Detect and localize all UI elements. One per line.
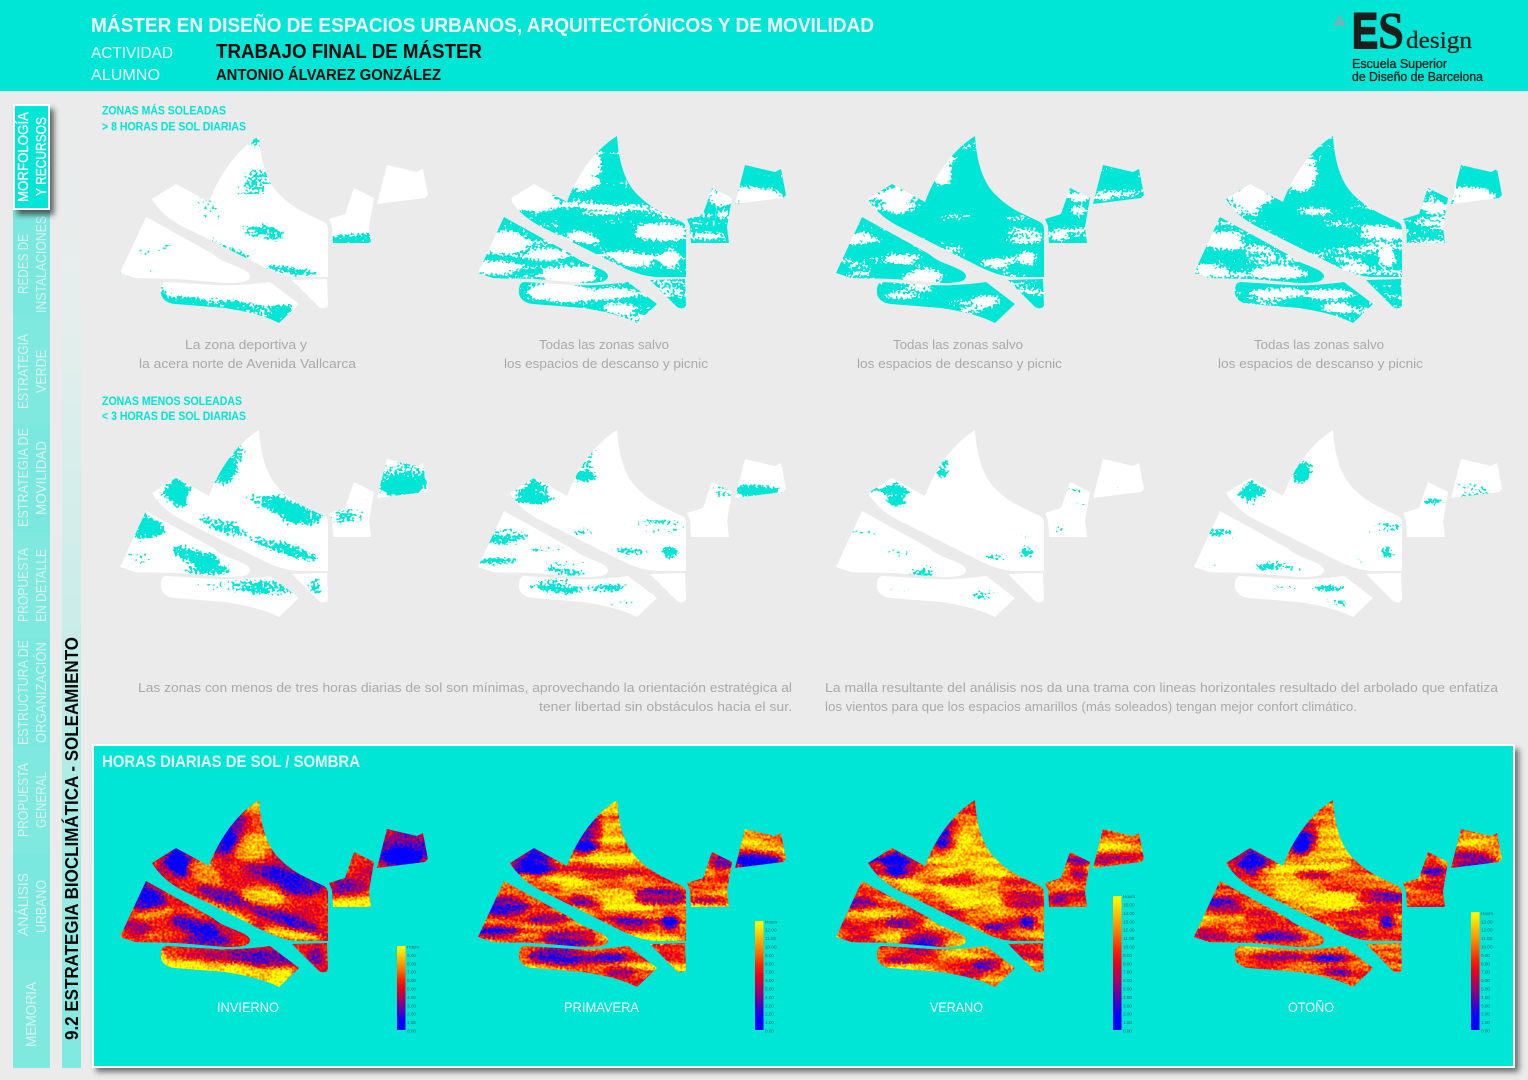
tab: estrategia de movilidad: MOVILIDAD bbox=[33, 441, 50, 515]
legend: spring: 0.00 bbox=[765, 1028, 774, 1034]
caption: spring sunniest: Todas las zonas salvo bbox=[539, 337, 669, 352]
label: winter: INVIERNO bbox=[217, 999, 279, 1015]
map: sunniest winter bbox=[120, 136, 428, 323]
legend: spring: 10.00 bbox=[765, 944, 777, 950]
legend: autumn: 4.00 bbox=[1481, 995, 1490, 1000]
legend: spring: Hours bbox=[765, 919, 778, 924]
legend: autumn: 12.00 bbox=[1481, 928, 1493, 933]
heading: least sunny zones: < 3 HORAS DE SOL DIARIAS bbox=[102, 411, 246, 423]
legend: autumn: 7.00 bbox=[1481, 970, 1490, 975]
heat map: autumn bbox=[1194, 800, 1502, 987]
legend: summer: 15.00 bbox=[1123, 902, 1135, 908]
legend: spring: 8.00 bbox=[765, 961, 774, 966]
legend: summer: 4.00 bbox=[1123, 995, 1132, 1000]
legend: winter: 9.00 bbox=[407, 953, 416, 958]
section title column bbox=[61, 105, 82, 1068]
legend: summer: 9.00 bbox=[1123, 953, 1132, 958]
legend: summer: 14.00 bbox=[1123, 911, 1135, 916]
heading: most sunny zones bbox=[102, 104, 246, 134]
legend: summer: 13.00 bbox=[1123, 919, 1135, 924]
legend: winter: 5.00 bbox=[407, 986, 416, 992]
tab: propuesta en detalle bbox=[13, 532, 50, 639]
legend: winter: 3.00 bbox=[407, 1003, 416, 1008]
heading: least sunny zones bbox=[102, 396, 246, 423]
legend: spring: 3.00 bbox=[765, 1003, 774, 1008]
tab: morfologia y recursos (active) bbox=[14, 105, 54, 215]
map: shadiest spring bbox=[478, 430, 786, 617]
logo: ESdesign: Escuela Superior bbox=[1352, 56, 1448, 71]
caption: winter sunniest: la acera norte de Avenida Vallcarca bbox=[139, 356, 357, 371]
tab: analisis urbano bbox=[13, 853, 50, 960]
tab: propuesta en detalle: EN DETALLE bbox=[33, 549, 50, 622]
tab: estructura de organizacion: ESTRUCTURA DE bbox=[15, 640, 32, 745]
logo: ESdesign: design bbox=[1406, 28, 1472, 54]
master title: MÁSTER EN DISEÑO DE ESPACIOS URBANOS, ARQUITECTÓNICOS Y DE MOVILIDAD bbox=[91, 13, 874, 37]
legend: autumn bbox=[1471, 911, 1494, 1034]
legend: autumn: Hours bbox=[1481, 911, 1494, 916]
legend: winter: 6.00 bbox=[407, 978, 416, 983]
legend: summer: Hours bbox=[1123, 894, 1136, 899]
legend: winter: 8.00 bbox=[407, 961, 416, 966]
text block: left paragraph: Las zonas con menos de tres horas diarias de sol son mínimas, aprovechando la orientación estratégica al bbox=[138, 680, 792, 695]
tab: estrategia de movilidad bbox=[13, 425, 50, 532]
tab: morfologia y recursos (active): Y RECURSOS bbox=[33, 117, 50, 196]
caption: summer sunniest: los espacios de descanso y picnic bbox=[857, 356, 1063, 371]
legend: winter bbox=[397, 944, 420, 1034]
legend: spring: 7.00 bbox=[765, 970, 774, 975]
legend: autumn: 8.00 bbox=[1481, 961, 1490, 966]
legend: winter: 0.00 bbox=[407, 1028, 416, 1034]
legend: spring: 5.00 bbox=[765, 986, 774, 992]
map: sunniest summer bbox=[836, 136, 1144, 323]
legend: winter: 4.00 bbox=[407, 995, 416, 1000]
text block: right paragraph: La malla resultante del análisis nos da una trama con lineas horizontales resultado del arbolado que enfatiza bbox=[825, 680, 1499, 695]
legend: autumn: 0.00 bbox=[1481, 1028, 1490, 1034]
header band bbox=[0, 0, 1528, 91]
activity value: TRABAJO FINAL DE MÁSTER bbox=[216, 40, 483, 63]
label: spring: PRIMAVERA bbox=[564, 999, 640, 1015]
legend: summer: 11.00 bbox=[1123, 936, 1135, 941]
legend: autumn: 5.00 bbox=[1481, 986, 1490, 992]
legend: spring: 6.00 bbox=[765, 978, 774, 983]
tab: memoria bbox=[13, 960, 50, 1068]
heading: least sunny zones: ZONAS MENOS SOLEADAS bbox=[102, 396, 242, 408]
legend: summer: 5.00 bbox=[1123, 986, 1132, 992]
caption: summer sunniest: Todas las zonas salvo bbox=[893, 337, 1023, 352]
tab: estrategia verde: VERDE bbox=[33, 350, 50, 393]
legend: autumn: 2.00 bbox=[1481, 1012, 1490, 1017]
tab: analisis urbano: ANÁLISIS bbox=[15, 873, 32, 936]
legend: spring: 11.00 bbox=[765, 936, 777, 941]
legend: summer: 6.00 bbox=[1123, 978, 1132, 983]
legend: autumn: 13.00 bbox=[1481, 919, 1493, 924]
caption: autumn sunniest bbox=[1218, 337, 1424, 371]
sidebar: navigation tabs bbox=[13, 105, 54, 1068]
student name: ANTONIO ÁLVAREZ GONZÁLEZ bbox=[216, 65, 441, 84]
label: autumn: OTOÑO bbox=[1288, 999, 1334, 1015]
logo: ESdesign bbox=[1333, 3, 1484, 84]
logo: ESdesign: de Diseño de Barcelona bbox=[1352, 69, 1484, 84]
legend: autumn: 9.00 bbox=[1481, 953, 1490, 958]
tab: morfologia y recursos (active): MORFOLOGÍA bbox=[15, 112, 32, 202]
map: shadiest summer bbox=[836, 430, 1144, 617]
legend: summer: 3.00 bbox=[1123, 1003, 1132, 1008]
label: summer: VERANO bbox=[930, 999, 983, 1015]
tab: estrategia de movilidad: ESTRATEGIA DE bbox=[15, 428, 32, 527]
heading: most sunny zones: > 8 HORAS DE SOL DIARIAS bbox=[102, 122, 246, 134]
tab: propuesta general bbox=[13, 747, 50, 853]
map: sunniest autumn bbox=[1194, 136, 1502, 323]
logo: ESdesign: E bbox=[1352, 3, 1378, 59]
caption: spring sunniest bbox=[504, 337, 709, 371]
tab: redes de instalaciones: INSTALACIONES bbox=[33, 216, 50, 313]
legend: spring: 2.00 bbox=[765, 1012, 774, 1017]
legend: summer: 12.00 bbox=[1123, 928, 1135, 933]
legend: spring: 1.00 bbox=[765, 1020, 774, 1025]
text block: left paragraph bbox=[138, 680, 792, 714]
tab: estrategia verde bbox=[13, 317, 50, 425]
map: sunniest spring bbox=[478, 136, 786, 323]
tab: estructura de organizacion: ORGANIZACIÓN bbox=[33, 642, 50, 743]
legend: spring bbox=[755, 919, 778, 1034]
tab: propuesta en detalle: PROPUESTA bbox=[15, 548, 32, 622]
map: shadiest winter bbox=[120, 430, 428, 617]
tab: propuesta general: GENERAL bbox=[33, 772, 50, 828]
legend: summer: 2.00 bbox=[1123, 1012, 1132, 1017]
caption: autumn sunniest: los espacios de descanso y picnic bbox=[1218, 356, 1424, 371]
tab: analisis urbano: URBANO bbox=[33, 880, 50, 933]
tab: propuesta general: PROPUESTA bbox=[15, 763, 32, 837]
legend: winter: 2.00 bbox=[407, 1012, 416, 1017]
legend: summer: 7.00 bbox=[1123, 970, 1132, 975]
legend: summer bbox=[1113, 894, 1136, 1034]
caption: winter sunniest: La zona deportiva y bbox=[185, 337, 308, 352]
text block: right paragraph: los vientos para que los espacios amarillos (más soleados) tengan mejor confort climático. bbox=[825, 699, 1357, 714]
legend: spring: 12.00 bbox=[765, 928, 777, 933]
heat map: spring bbox=[478, 800, 786, 987]
heat map: winter bbox=[120, 800, 428, 987]
caption: summer sunniest bbox=[857, 337, 1063, 371]
legend: summer: 0.00 bbox=[1123, 1028, 1132, 1034]
heading: most sunny zones: ZONAS MÁS SOLEADAS bbox=[102, 104, 226, 118]
tab: redes de instalaciones: REDES DE bbox=[15, 234, 32, 294]
tab: estrategia verde: ESTRATEGIA bbox=[15, 334, 32, 409]
tab: redes de instalaciones bbox=[13, 210, 50, 317]
caption: spring sunniest: los espacios de descanso y picnic bbox=[504, 356, 709, 371]
map: shadiest autumn bbox=[1194, 430, 1502, 617]
panel: daily sun and shade hours bbox=[93, 745, 1519, 1072]
text block: left paragraph: tener libertad sin obstáculos hacia el sur. bbox=[539, 699, 792, 714]
tab: memoria: MEMORIA bbox=[23, 982, 40, 1047]
legend: winter: 1.00 bbox=[407, 1020, 416, 1025]
panel heading: HORAS DIARIAS DE SOL / SOMBRA bbox=[102, 753, 360, 771]
heat map: summer bbox=[836, 800, 1144, 987]
legend: autumn: 1.00 bbox=[1481, 1020, 1490, 1025]
text block: right paragraph bbox=[825, 680, 1499, 714]
legend: spring: 4.00 bbox=[765, 995, 774, 1000]
legend: winter: 7.00 bbox=[407, 970, 416, 975]
legend: spring: 9.00 bbox=[765, 953, 774, 958]
legend: summer: 8.00 bbox=[1123, 961, 1132, 966]
legend: summer: 1.00 bbox=[1123, 1020, 1132, 1025]
activity label: ACTIVIDAD bbox=[91, 45, 173, 62]
legend: autumn: 11.00 bbox=[1481, 936, 1493, 941]
legend: autumn: 6.00 bbox=[1481, 978, 1490, 983]
caption: autumn sunniest: Todas las zonas salvo bbox=[1254, 337, 1384, 352]
legend: winter: Hours bbox=[407, 944, 420, 950]
section title column: 9.2 ESTRATEGIA BIOCLIMÁTICA - SOLEAMIENTO bbox=[61, 637, 82, 1040]
legend: autumn: 3.00 bbox=[1481, 1003, 1490, 1008]
logo: ESdesign: S bbox=[1378, 3, 1404, 60]
legend: summer: 10.00 bbox=[1123, 944, 1135, 950]
caption: winter sunniest bbox=[139, 337, 357, 371]
student label: ALUMNO bbox=[91, 67, 160, 84]
tab: estructura de organizacion bbox=[13, 639, 50, 747]
legend: autumn: 10.00 bbox=[1481, 944, 1493, 950]
